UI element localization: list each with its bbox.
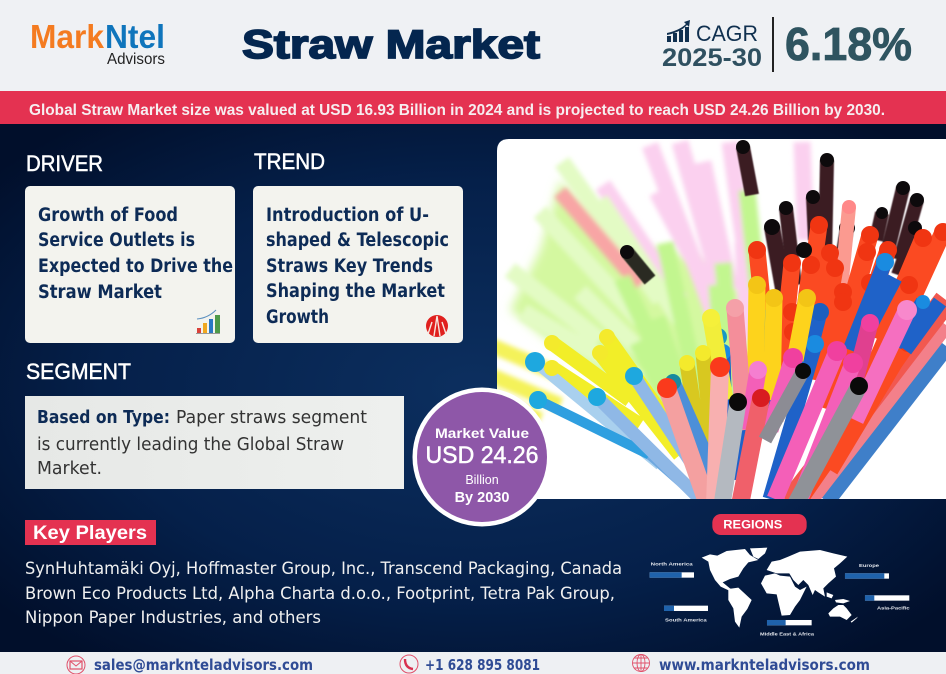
logo: Ntel xyxy=(105,18,165,55)
CAGR period: 2025-30 xyxy=(662,44,762,72)
pink straws xyxy=(748,310,907,499)
summary banner xyxy=(0,91,946,124)
key players list: SynHuhtamäki Oyj, Hoffmaster Group, Inc., Transcend Packaging, Canada xyxy=(25,559,622,579)
trend text: Shaping the Market xyxy=(266,281,445,302)
panel: trend xyxy=(253,186,463,343)
key players list: Brown Eco Products Ltd, Alpha Charta d.o.o., Footprint, Tetra Pak Group, xyxy=(25,584,615,604)
blurred lime mass xyxy=(506,178,748,402)
driver text xyxy=(38,205,233,303)
heading: segment: SEGMENT xyxy=(26,359,131,384)
key players list xyxy=(25,559,622,628)
market value badge xyxy=(412,388,552,526)
header band xyxy=(0,0,946,91)
yellow and cyan left straws xyxy=(535,337,725,499)
website: www.marknteladvisors.com xyxy=(659,656,870,674)
segment text: Based on Type: xyxy=(37,407,170,428)
world map xyxy=(702,548,858,628)
email address: sales@marknteladvisors.com xyxy=(94,656,313,674)
footer contact bar xyxy=(0,652,946,674)
region bars xyxy=(650,572,909,625)
segment text: is currently leading the Global Straw xyxy=(37,434,344,455)
driver text: Service Outlets is xyxy=(38,230,195,251)
panel: segment xyxy=(25,396,404,489)
CAGR label: CAGR xyxy=(696,21,758,46)
front straws xyxy=(667,367,859,505)
dark background xyxy=(0,124,946,652)
icon: bar chart xyxy=(196,310,220,334)
segment text xyxy=(37,407,367,479)
driver text: Growth of Food xyxy=(38,205,178,226)
driver text: Expected to Drive the xyxy=(38,256,233,277)
trend text: Growth xyxy=(266,307,329,328)
key players list: Nippon Paper Industries, and others xyxy=(25,608,321,628)
regions tag xyxy=(712,514,807,535)
market value badge: Billion xyxy=(465,473,499,487)
key players tag: Key Players xyxy=(33,523,147,544)
market value badge: USD 24.26 xyxy=(426,442,538,469)
icon: CAGR growth chart xyxy=(667,20,690,42)
regions tag: REGIONS xyxy=(723,518,782,532)
region labels: North America xyxy=(651,562,693,568)
trend text: Straws Key Trends xyxy=(266,256,433,277)
logo: Mark xyxy=(30,18,105,55)
trend text: Introduction of U- xyxy=(266,205,429,226)
region labels: Asia-Pacific xyxy=(877,606,910,612)
trend text xyxy=(266,205,449,328)
phone number: +1 628 895 8081 xyxy=(425,656,540,674)
red straws xyxy=(757,207,943,499)
market value badge: Market Value xyxy=(435,425,529,441)
heading: driver: DRIVER xyxy=(26,151,103,176)
region labels: Europe xyxy=(859,563,879,569)
panel: driver xyxy=(25,186,235,343)
driver text: Straw Market xyxy=(38,282,162,303)
logo xyxy=(30,18,165,68)
icon: globe xyxy=(632,654,650,672)
market value badge: By 2030 xyxy=(455,490,509,506)
title: Straw Market xyxy=(242,23,540,67)
icon: phone xyxy=(400,655,418,673)
blue straws xyxy=(723,262,940,499)
segment text: Market. xyxy=(37,458,102,479)
photo: colourful straws xyxy=(490,139,946,505)
right side diagonal straws xyxy=(790,300,946,503)
key players tag xyxy=(25,520,156,545)
region labels: South America xyxy=(665,618,707,624)
icon: red road emblem xyxy=(426,315,448,337)
heading: trend: TREND xyxy=(254,149,325,174)
CAGR value: 6.18% xyxy=(785,18,912,70)
yellow upright straws xyxy=(711,285,807,430)
regions map xyxy=(650,514,910,638)
region labels: Middle East & Africa xyxy=(760,632,814,638)
back black straws xyxy=(627,147,917,300)
icon: email xyxy=(67,656,85,674)
region labels xyxy=(651,562,910,638)
summary banner: Global Straw Market size was valued at USD 16.93 Billion in 2024 and is projected to reach USD 24.26 Billion by 2030. xyxy=(29,102,885,119)
segment text: Paper straws segment xyxy=(176,407,367,428)
logo: Advisors xyxy=(107,51,165,68)
trend text: shaped & Telescopic xyxy=(266,230,449,251)
